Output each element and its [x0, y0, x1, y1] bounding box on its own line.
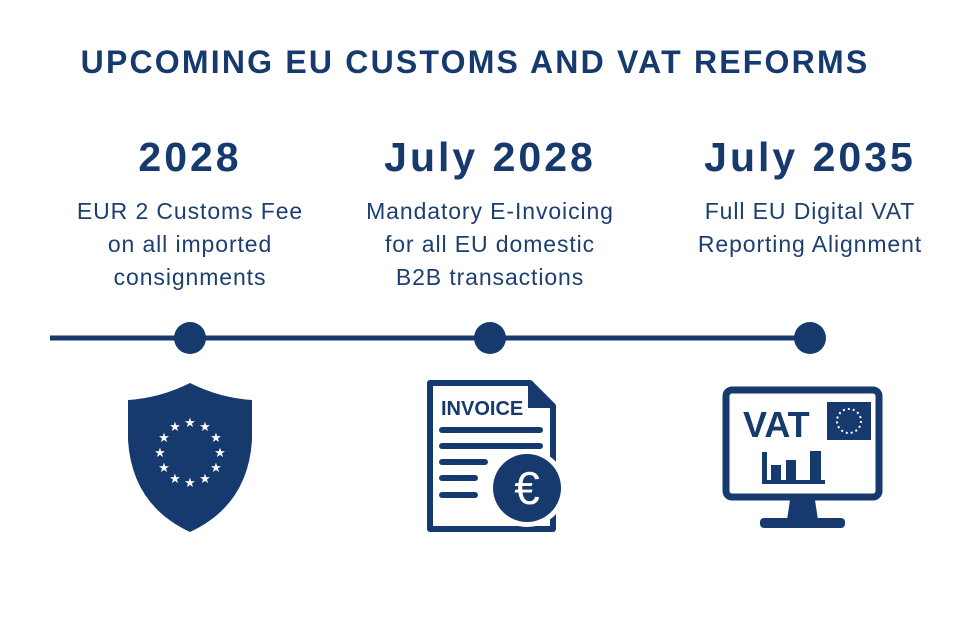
year: 2028: 2028 [138, 134, 242, 180]
icon: EU shield: ★ [210, 430, 222, 445]
icon: EU shield: ★ [158, 460, 170, 475]
timeline [50, 322, 826, 354]
text: e-invoicing: for all EU domestic [385, 231, 595, 257]
icon: EU shield [128, 383, 252, 532]
text: e-invoicing: B2B transactions [396, 264, 584, 290]
icon: EU shield: ★ [210, 460, 222, 475]
text: digital VAT: Reporting Alignment [698, 231, 922, 257]
icon: EU shield: ★ [184, 475, 196, 490]
icon: VAT monitor [726, 390, 879, 528]
text: customs fee: consignments [114, 264, 266, 290]
icon: invoice [430, 383, 566, 529]
icon: EU shield: ★ [199, 419, 211, 434]
icon: invoice: INVOICE [441, 398, 523, 420]
icon: EU shield: ★ [154, 445, 166, 460]
icon: EU shield: ★ [169, 419, 181, 434]
year: July 2035: July 2035 [704, 134, 916, 180]
text: customs fee: on all imported [108, 231, 272, 257]
year: July 2028: July 2028 [384, 134, 596, 180]
text: e-invoicing [366, 198, 614, 290]
text: customs fee [77, 198, 303, 290]
icon: EU shield: ★ [214, 445, 226, 460]
icon: EU shield: ★ [169, 471, 181, 486]
icon: EU shield: ★ [199, 471, 211, 486]
text: customs fee: EUR 2 Customs Fee [77, 198, 303, 224]
text: digital VAT [698, 198, 922, 257]
icon: invoice: € [514, 462, 540, 514]
title: UPCOMING EU CUSTOMS AND VAT REFORMS [81, 44, 869, 80]
icon: EU shield: ★ [184, 415, 196, 430]
icon: VAT monitor: VAT [743, 404, 810, 445]
text: e-invoicing: Mandatory E-Invoicing [366, 198, 614, 224]
icon: EU shield: ★ [158, 430, 170, 445]
text: digital VAT: Full EU Digital VAT [705, 198, 915, 224]
